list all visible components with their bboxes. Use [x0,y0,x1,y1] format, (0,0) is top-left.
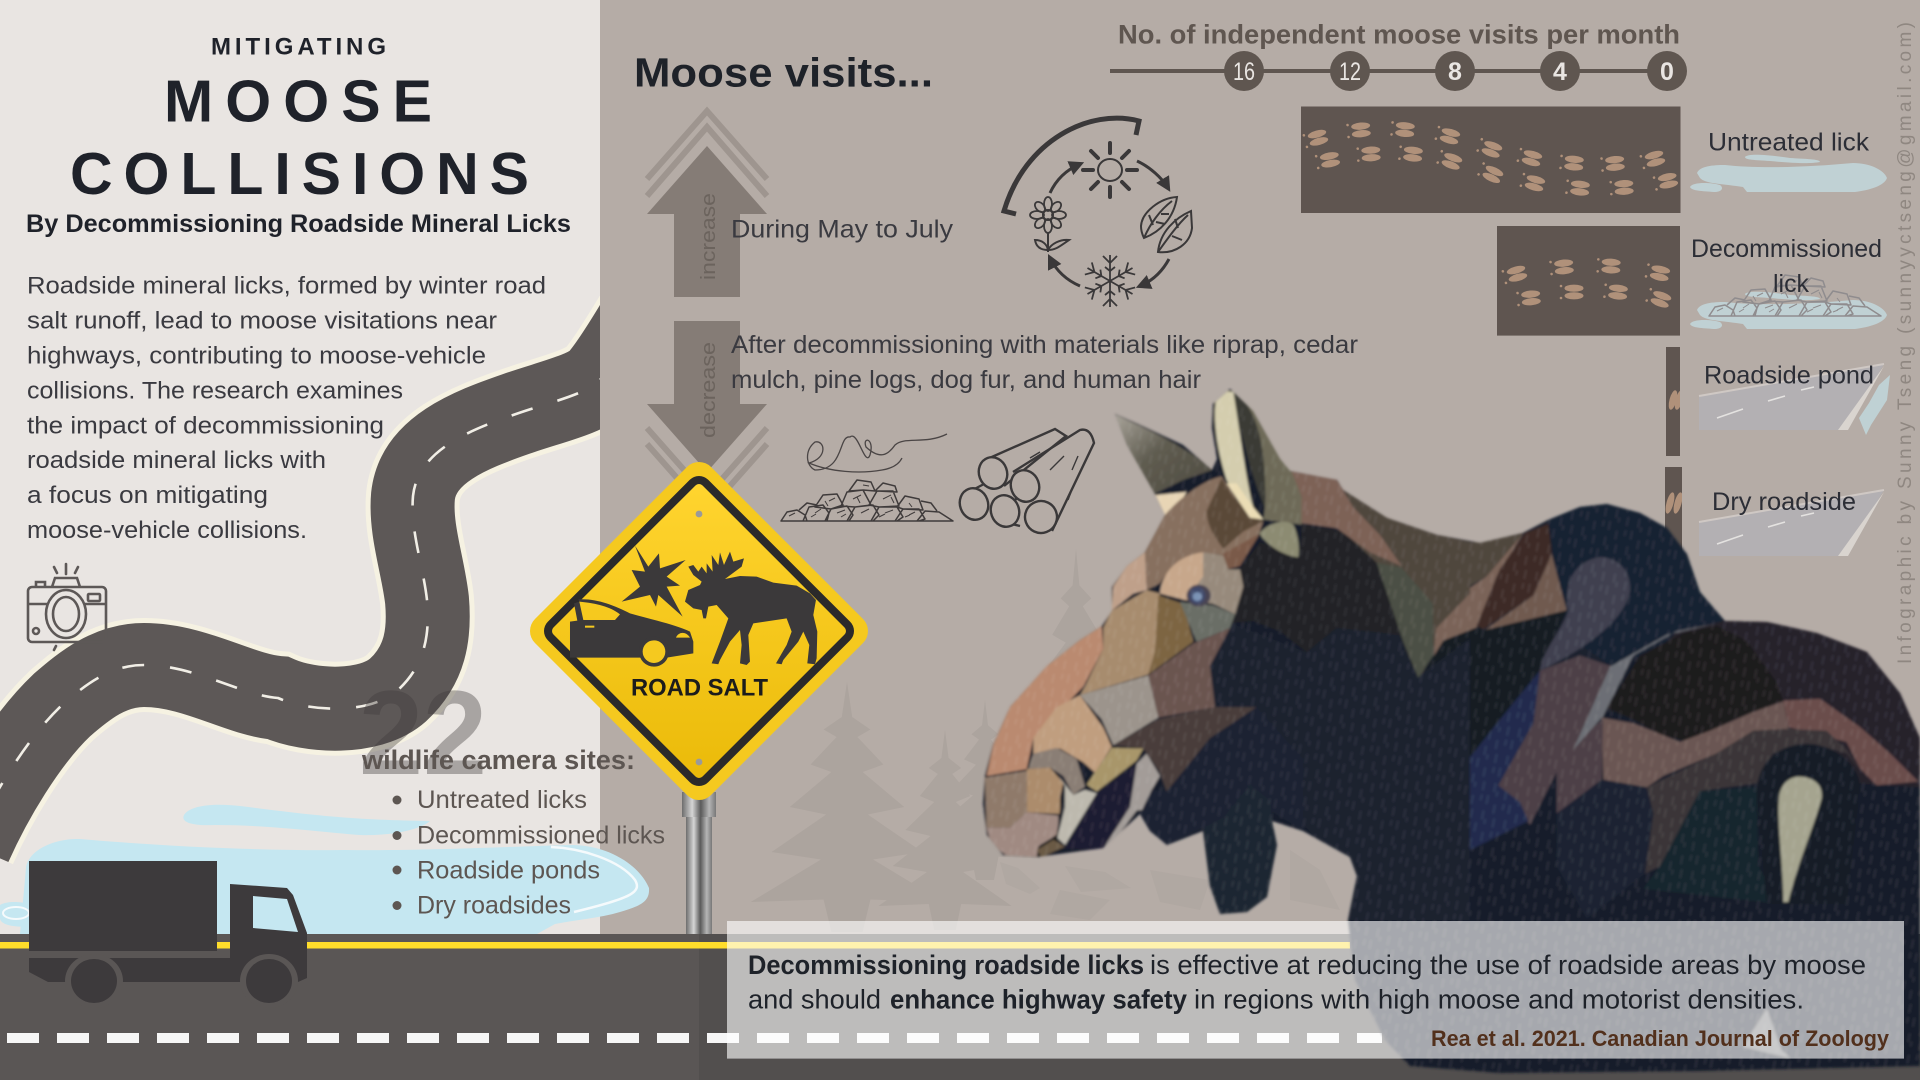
conclusion text: and should [748,985,881,1015]
chart axis: visits per month: 4 [1553,58,1567,86]
label: decommissioned lick: lick [1773,270,1809,298]
sign board [547,479,851,783]
moose head and neck patches [985,389,1470,920]
icon: dry roadside [1699,490,1884,556]
camera sites list: Dry roadsides [417,892,571,920]
left title panel [0,0,600,934]
conclusion text: in regions with high moose and motorist densities. [1194,985,1804,1015]
bar: untreated lick [1301,106,1680,213]
bar: roadside pond [1666,347,1680,456]
camera sites list: Roadside ponds [417,857,600,885]
icon: sun [1083,143,1137,197]
intro paragraph: a focus on mitigating [27,482,268,509]
road salt sign [547,479,851,934]
icon: leaves [1141,197,1192,252]
faint background fir trees [751,549,1340,932]
label: dry roadside: Dry roadside [1712,488,1856,516]
burst [622,546,686,617]
arrow: decrease: decrease [698,342,720,438]
chart axis: visits per month [1110,20,1687,91]
chart axis: visits per month: 0 [1660,58,1674,86]
arrow: increase: increase [698,193,720,280]
road: yellow centre line [0,942,1350,948]
label: untreated lick: Untreated lick [1708,129,1870,157]
text: after decommissioning: After decommissioning with materials like riprap, cedar [731,331,1358,359]
moose illustration [960,380,1920,1080]
road: white dashes [7,1033,1382,1043]
intro paragraph: collisions. The research examines [27,378,403,405]
intro paragraph: moose-vehicle collisions. [27,517,307,544]
intro paragraph [27,273,546,544]
icon: hair [808,434,947,472]
label: decommissioned lick: Decommissioned [1691,235,1882,263]
text: after decommissioning [731,331,1358,394]
car silhouette [570,599,693,658]
camera sites list: Untreated licks [417,786,587,814]
chart axis: visits per month: 8 [1448,58,1462,86]
chart axis: visits per month: 12 [1339,58,1361,86]
moose fur texture [960,380,1920,1080]
moose eye [1187,585,1211,607]
heading: collisions: COLLISIONS [70,141,529,207]
winding road [0,320,640,845]
text: during may to july: During May to July [731,216,954,244]
intro paragraph: Roadside mineral licks, formed by winter road [27,273,546,300]
conclusion panel [727,921,1904,1059]
sign post [682,792,716,934]
heading: moose visits: Moose visits... [634,49,933,95]
credit line: Infographic by Sunny Tseng (sunnyyctseng@gmail.com) [1895,22,1916,664]
icon: decommissioned lick puddle with rocks [1690,275,1887,329]
moose silhouette [685,552,817,665]
camera sites list: Decommissioned licks [417,821,665,849]
arrow: decrease [647,321,767,512]
icon: roadside pond [1699,364,1890,435]
bottom road [0,934,1920,1080]
icon: flower [1030,197,1069,252]
intro paragraph: salt runoff, lead to moose visitations near [27,308,497,335]
bar: dry roadside [1665,467,1682,550]
intro paragraph: the impact of decommissioning [27,413,384,440]
icon: pine logs [955,429,1094,538]
camera sites list [392,786,665,920]
subtitle: By Decommissioning Roadside Mineral Licks [26,210,571,238]
big number 22: 22 [359,666,487,800]
camera sites heading: wildlife camera sites: [361,745,635,775]
arrow: increase [647,111,767,297]
icon: camera [28,564,106,650]
label: roadside pond: Roadside pond [1704,362,1874,390]
icon: seasons cycle [1004,118,1192,307]
cycle arrows [1050,161,1169,286]
heading: moose: MOOSE [164,68,432,134]
text: after decommissioning: mulch, pine logs, dog fur, and human hair [731,366,1201,394]
sign text: ROAD SALT [631,675,768,702]
chart axis: visits per month: 16 [1233,58,1255,86]
moose body base [960,380,1920,1080]
sign pictogram [570,546,817,667]
icon: snowflake [1084,255,1136,307]
icon: untreated lick puddle [1690,155,1887,192]
conclusion text: is effective at reducing the use of roadside areas by moose [1150,950,1866,980]
icon: truck [29,861,307,1008]
icon: riprap rocks [781,480,953,521]
moose body patches [1333,452,1920,1058]
intro paragraph: highways, contributing to moose-vehicle [27,343,486,370]
intro paragraph: roadside mineral licks with [27,447,326,474]
conclusion text: Decommissioning roadside licks [748,950,1144,980]
chart axis: visits per month: No. of independent moose visits per month [1118,20,1680,50]
water puddles [0,805,649,934]
conclusion text [748,950,1866,1015]
citation: Rea et al. 2021. Canadian Journal of Zoology [1431,1026,1890,1051]
label: decommissioned lick [1691,235,1882,298]
conclusion text: enhance highway safety [890,985,1187,1015]
heading: mitigating: MITIGATING [211,34,386,61]
bar: decommissioned lick [1497,226,1680,336]
title block [26,34,571,238]
